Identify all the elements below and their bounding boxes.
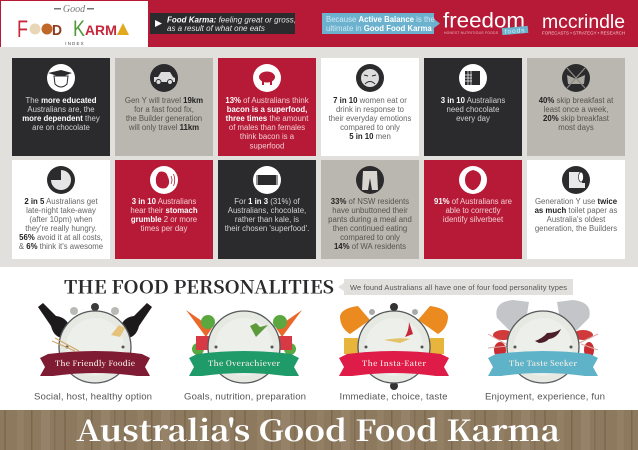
logo: Good Food Karma Index: AR — [85, 22, 105, 38]
chef hats and lobster — [488, 300, 598, 358]
caption: Insta-Eater: Immediate, choice, taste — [340, 391, 448, 402]
panel: fast food travel — [115, 58, 213, 156]
panel: bacon — [218, 58, 316, 156]
footer title: Australia's Good Food Karma — [76, 409, 560, 450]
banner: The Overachiever — [208, 358, 280, 369]
icon: leaf — [459, 166, 487, 194]
text: need chocolate — [447, 105, 499, 114]
text: For 1 in 3 (31%) of — [234, 197, 300, 206]
text: Australia's oldest — [547, 215, 606, 224]
active balance arrow box: Because Active Balance is the — [326, 15, 435, 24]
icon: car — [150, 64, 178, 92]
logo: Good Food Karma Index: K — [73, 16, 85, 41]
text: think bacon is a — [240, 132, 295, 141]
text: Gen Y will travel 19km — [125, 96, 203, 105]
definition box — [150, 13, 296, 34]
banner: The Insta-Eater — [362, 358, 426, 369]
text: their chosen 'superfood'. — [225, 224, 309, 233]
icon: chocolate bar — [253, 166, 281, 194]
caption: Friendly Foodie: Social, host, healthy option — [34, 391, 152, 402]
text: are on chocolate — [32, 123, 90, 132]
text: of males than females — [229, 123, 305, 132]
text: as much toilet paper as — [535, 206, 617, 215]
text: 3 in 10 Australians — [132, 197, 196, 206]
text: three times the amount — [226, 114, 308, 123]
logo: freedom foods: freedom — [443, 10, 525, 32]
text: 14% of WA residents — [334, 242, 406, 251]
icon: pants — [356, 166, 384, 194]
footer wood band — [0, 410, 638, 450]
logo: Good Food Karma Index: D — [52, 22, 62, 39]
text: Australians are, the — [27, 105, 95, 114]
text: will only travel 11km — [129, 123, 199, 132]
logo: Good Food Karma Index: Good — [63, 4, 86, 15]
active balance arrow box: ultimate in Good Food Karma — [326, 24, 432, 33]
icon: crossed out breakfast — [562, 64, 590, 92]
text: drink in response to — [336, 105, 405, 114]
caption: Overachiever: Goals, nutrition, preparation — [184, 391, 306, 402]
caption: Taste Seeker: Enjoyment, experience, fun — [485, 391, 605, 402]
icon: stomach — [150, 166, 178, 194]
icon: pig — [253, 64, 281, 92]
text: 56% avoid it at all costs, — [19, 233, 103, 242]
panel: toilet paper — [527, 160, 625, 259]
logo: Good Food Karma Index: F — [17, 16, 28, 43]
food scrap — [52, 325, 125, 351]
text: Australians, chocolate, — [228, 206, 306, 215]
text: have unbuttoned their — [332, 206, 408, 215]
text: 13% of Australians think — [225, 96, 309, 105]
text: able to correctly — [445, 206, 501, 215]
leaf — [250, 323, 268, 337]
text: 91% of Australians are — [434, 197, 512, 206]
definition box: as a result of what one eats — [167, 24, 265, 33]
logo: mccrindle: mccrindle — [542, 12, 625, 33]
text: their everyday emotions — [329, 114, 411, 123]
callout: We found Australians all have one of four food personality types — [350, 283, 567, 292]
text: then continued eating — [333, 224, 407, 233]
logo: mccrindle: FORECASTS • STRATEGY • RESEARCH — [542, 30, 625, 36]
logo: freedom foods: foods — [504, 27, 526, 36]
carrots and greens — [186, 310, 302, 355]
personality: The Overachiever — [186, 310, 302, 383]
text: 3 in 10 Australians — [441, 96, 505, 105]
text: they're really hungry. — [25, 224, 97, 233]
text: least once a week, — [544, 105, 608, 114]
panel: education — [12, 58, 110, 156]
personality: The Friendly Foodie — [38, 303, 152, 383]
banner: The Taste Seeker — [509, 358, 577, 369]
heading: THE FOOD PERSONALITIES — [64, 274, 334, 300]
header bar — [0, 0, 638, 47]
panel: breakfast — [527, 58, 625, 156]
text: identify silverbeet — [443, 215, 504, 224]
panel: late night take-away — [12, 160, 110, 259]
panel: chocolate superfood — [218, 160, 316, 259]
text: The more educated — [25, 96, 97, 105]
panel: unbuttoned pants — [321, 160, 419, 259]
panel: silverbeet — [424, 160, 522, 259]
text: 5 in 10 men — [349, 132, 391, 141]
logo: Good Food Karma Index: M — [105, 22, 117, 38]
panel: chocolate — [424, 58, 522, 156]
text: times per day — [141, 224, 187, 233]
food scrap — [535, 329, 561, 343]
banner: The Friendly Foodie — [55, 358, 135, 369]
icon: toilet roll — [562, 166, 590, 194]
text: 40% skip breakfast at — [539, 96, 613, 105]
logo: Good Food Karma Index — [1, 1, 148, 47]
text: compared to only — [340, 233, 400, 242]
text: 20% skip breakfast — [543, 114, 609, 123]
text: every day — [456, 114, 490, 123]
icon: graduate — [47, 64, 75, 92]
text: Generation Y use twice — [535, 197, 617, 206]
text: rather than kale, is — [235, 215, 299, 224]
text: & 6% think it's awesome — [19, 242, 103, 251]
active balance arrow box — [322, 13, 440, 34]
text: bacon is a superfood, — [227, 105, 307, 114]
panel: stomach grumble — [115, 160, 213, 259]
hot dogs and fries — [340, 303, 448, 390]
text: pants during a meal and — [328, 215, 412, 224]
text: for a fast food fix, — [134, 105, 194, 114]
background band — [0, 47, 638, 267]
definition box: Food Karma: feeling great or gross, — [167, 16, 296, 25]
icon: sad face — [356, 64, 384, 92]
text: most days — [558, 123, 594, 132]
text: generation, the Builders — [535, 224, 617, 233]
logo: Good Food Karma Index: INDEX — [65, 41, 85, 46]
icon: clock — [47, 166, 75, 194]
text: superfood — [250, 142, 284, 150]
text: 33% of NSW residents — [331, 197, 409, 206]
callout — [338, 279, 573, 295]
logo: freedom foods: HONEST NUTRITIOUS FOODS — [444, 31, 499, 35]
bottles — [38, 303, 152, 338]
icon: chocolate block — [459, 64, 487, 92]
text: the Builder generation — [126, 114, 202, 123]
text: compared to only — [340, 123, 400, 132]
personality: The Insta-Eater — [339, 303, 449, 390]
text: more dependent they — [22, 114, 100, 123]
food scrap — [384, 322, 413, 343]
text: grumble 2 or more — [131, 215, 197, 224]
text: hear their stomach — [130, 206, 198, 215]
text: late-night take-away — [26, 206, 96, 215]
text: (after 10pm) when — [29, 215, 93, 224]
panel: emotional eating — [321, 58, 419, 156]
text: 7 in 10 women eat or — [333, 96, 407, 105]
text: 2 in 5 Australians get — [24, 197, 98, 206]
personality: The Taste Seeker — [488, 300, 598, 383]
